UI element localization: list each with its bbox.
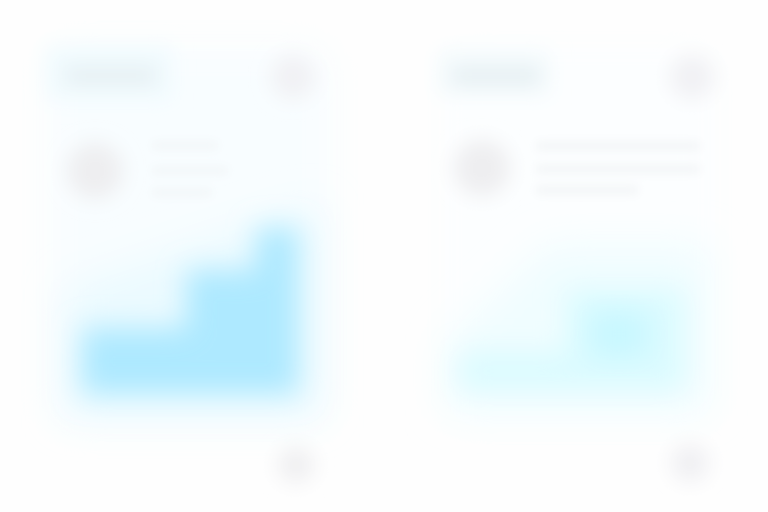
icon: left bottom [278,447,314,483]
chart: left area [65,205,320,415]
text block: left [152,142,228,196]
panel: right [438,48,715,482]
icon: right top [670,55,714,99]
icon: right profile [454,140,510,196]
text block: right [536,142,700,194]
icon: left top [271,55,315,99]
heading: left [46,46,172,100]
icon: right bottom [671,444,709,482]
icon: left profile [67,143,123,199]
chart: right area [445,245,708,410]
panel: left [46,46,330,483]
heading: right [438,50,550,96]
